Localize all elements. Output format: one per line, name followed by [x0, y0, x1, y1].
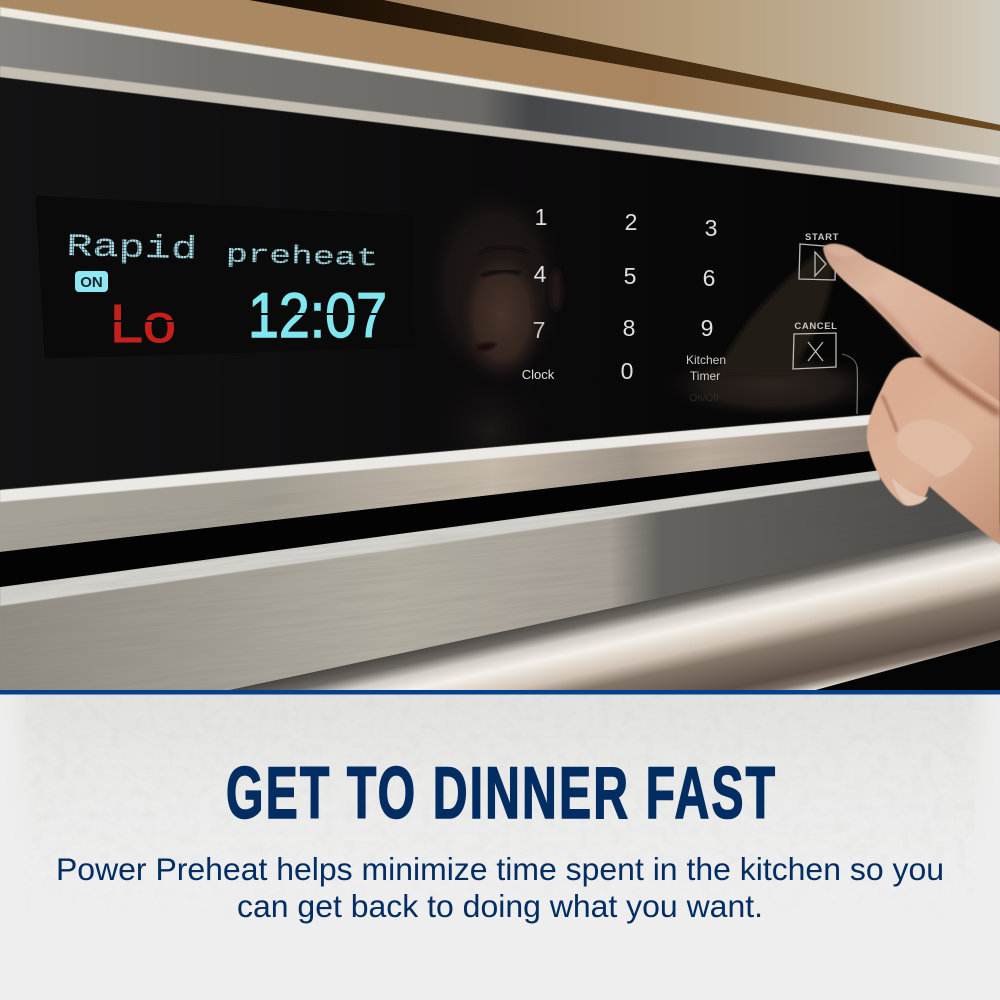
body copy: Power Preheat helps minimize time spent in the kitchen so you	[56, 851, 944, 887]
black gap	[0, 450, 880, 587]
fingertip highlight	[825, 245, 858, 256]
keypad labels: 5	[624, 263, 636, 289]
display window	[38, 198, 413, 356]
keypad labels: 6	[703, 265, 715, 291]
photo: oven control panel	[0, 0, 1000, 746]
finger nail	[897, 420, 973, 477]
lower steel rail	[0, 470, 985, 690]
cyan LED clock: 12:07: 12:07	[248, 281, 387, 351]
keypad labels: Timer	[690, 369, 720, 383]
keypad labels	[522, 204, 726, 404]
blue divider	[0, 690, 1000, 694]
keypad labels: Kitchen	[686, 353, 726, 367]
top steel trim	[0, 7, 1000, 197]
finger shading	[868, 298, 920, 352]
heading: GET TO DINNER FAST	[226, 753, 775, 835]
start button	[799, 232, 839, 280]
start button: START	[805, 232, 839, 243]
red LED: Lo: Lo	[110, 294, 176, 354]
black glass panel	[0, 0, 1000, 690]
upper wood cabinet	[0, 0, 1000, 157]
keypad labels: 3	[705, 215, 717, 241]
dot-matrix text: Rapid preheat	[69, 234, 374, 267]
dot-matrix text: Rapid preheat: Rapid	[66, 228, 198, 268]
ON badge: ON	[80, 274, 103, 291]
hand	[823, 244, 1000, 545]
upper steel rail	[0, 414, 880, 552]
red LED: Lo	[114, 304, 174, 343]
body copy: can get back to doing what you want.	[237, 888, 763, 924]
keypad labels: 2	[625, 209, 637, 235]
keypad labels: 4	[534, 261, 547, 287]
index finger	[823, 244, 1000, 420]
concrete texture	[25, 694, 975, 934]
crease shadow	[925, 358, 1000, 414]
cancel button: CANCEL	[794, 321, 838, 332]
panel top tone	[22, 694, 978, 755]
reflection: woman's face	[442, 207, 563, 448]
keypad labels: 9	[701, 315, 713, 341]
keypad labels: 1	[535, 204, 547, 230]
keypad labels: 7	[533, 317, 545, 343]
keypad labels: 8	[623, 315, 635, 341]
brushed metal texture	[6, 474, 878, 594]
handle	[230, 524, 1000, 690]
panel background	[0, 694, 1000, 1000]
middle finger and palm	[867, 357, 1000, 545]
reflection: hand on glass	[686, 253, 860, 414]
ON badge	[75, 271, 108, 292]
cancel button	[793, 321, 838, 369]
keypad labels: On/Off	[689, 393, 719, 404]
keypad labels: 0	[621, 358, 633, 384]
keypad labels: Clock	[522, 367, 555, 382]
caption panel	[0, 690, 1000, 924]
dot-matrix text: Rapid preheat: preheat	[226, 240, 378, 273]
thumb tip	[892, 478, 928, 506]
display backing	[36, 196, 168, 358]
